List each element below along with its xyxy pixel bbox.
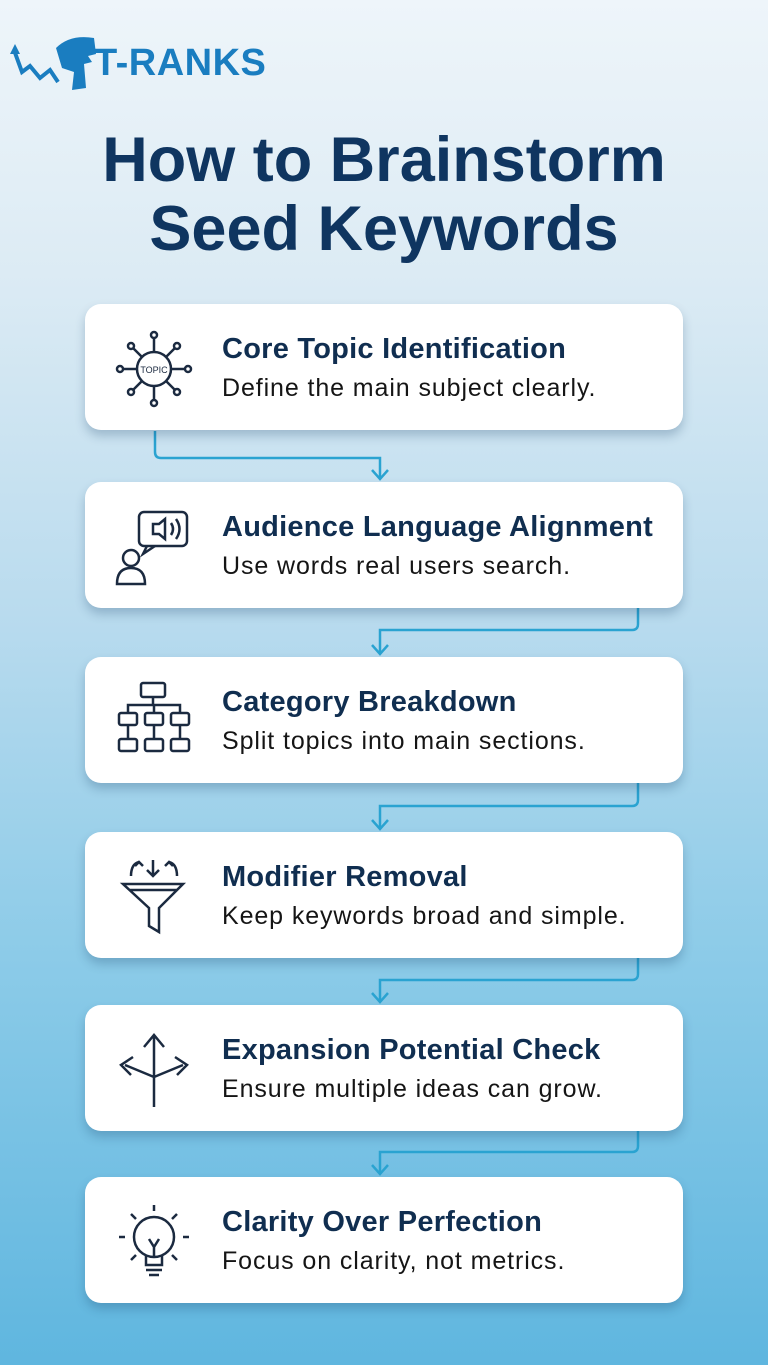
logo <box>10 37 266 90</box>
card: core topic: Core Topic Identification <box>222 333 566 365</box>
card: audience <box>85 482 683 608</box>
icon: topic hub <box>116 330 192 408</box>
card: core topic <box>85 304 683 430</box>
card: core topic: Define the main subject clearly. <box>222 374 596 402</box>
card: expansion: Expansion Potential Check <box>222 1034 601 1066</box>
icon: hierarchy <box>118 682 190 752</box>
card: modifier <box>85 832 683 958</box>
card: clarity: Clarity Over Perfection <box>222 1206 542 1238</box>
card: category <box>85 657 683 783</box>
icon: light bulb <box>119 1205 189 1276</box>
title: How to Brainstorm <box>102 125 666 195</box>
title: Seed Keywords <box>149 194 619 264</box>
card: modifier: Keep keywords broad and simple. <box>222 902 626 930</box>
icon: branching arrows <box>119 1033 189 1107</box>
card: modifier: Modifier Removal <box>222 861 468 893</box>
card: audience: Use words real users search. <box>222 552 571 580</box>
card: category: Category Breakdown <box>222 686 517 718</box>
card: audience: Audience Language Alignment <box>222 511 653 543</box>
icon: speech person <box>116 510 188 586</box>
card: category: Split topics into main sections. <box>222 727 586 755</box>
logo: T-RANKS <box>94 42 266 84</box>
card: expansion: Ensure multiple ideas can grow. <box>222 1075 603 1103</box>
icon: topic hub: TOPIC <box>140 365 168 375</box>
card: clarity: Focus on clarity, not metrics. <box>222 1247 565 1275</box>
card: clarity <box>85 1177 683 1303</box>
card: expansion <box>85 1005 683 1131</box>
title <box>102 125 666 264</box>
icon: funnel <box>120 860 186 934</box>
